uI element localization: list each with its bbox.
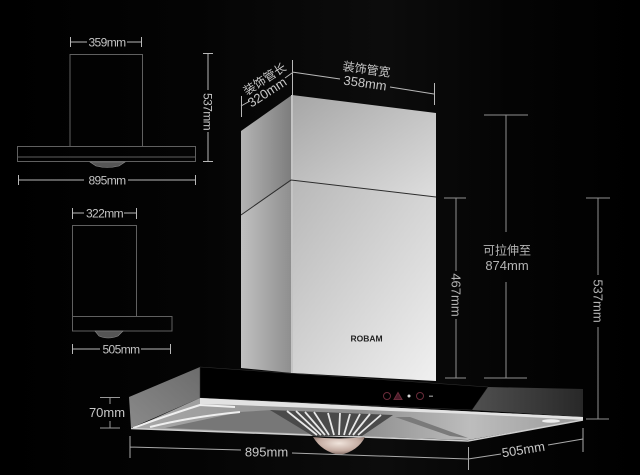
- dimension: 359mm: [70, 36, 142, 50]
- dimension: 359mm: 359mm: [88, 36, 126, 50]
- dimension: 874mm pull-out height: 可拉伸至: [483, 242, 531, 258]
- hood right side panel: [472, 387, 583, 417]
- dimension: 895mm front: [18, 174, 196, 188]
- fan slats: [270, 410, 393, 436]
- front hood outline: [17, 146, 196, 162]
- left white curved trim: [133, 405, 240, 428]
- chimney left face upper: [241, 95, 292, 215]
- brand logo: ROBAM: [350, 334, 383, 344]
- dimension: 467mm: [444, 198, 466, 378]
- dimension: 874mm pull-out height: 874mm: [485, 258, 529, 273]
- dimension: 874mm pull-out height: [483, 115, 531, 378]
- dimension: 895mm main: 895mm: [245, 444, 288, 460]
- dimension: 358mm chimney width: 装饰管宽: [342, 58, 391, 80]
- hood left side panel: [129, 367, 200, 428]
- hood bottom edge: [131, 420, 583, 441]
- dimension: 505mm side: [72, 342, 170, 356]
- dimension: 320mm chimney depth: 装饰管长: [240, 59, 289, 98]
- main product: range hood: [129, 95, 583, 455]
- dimension: 322mm: [72, 206, 136, 220]
- chimney left face lower: [241, 180, 292, 373]
- touch controls: [384, 392, 433, 400]
- front chimney outline: [70, 54, 142, 146]
- left underside shadow: [165, 410, 315, 434]
- dimension: 895mm main: [130, 436, 468, 470]
- dimension: 537mm front: [200, 54, 214, 162]
- dimension: 358mm chimney width: 358mm: [343, 73, 388, 93]
- side-view diagram: [72, 206, 172, 356]
- right underside shade: [395, 417, 468, 438]
- chimney corner highlight: [291, 95, 293, 373]
- side fan outline: [95, 331, 123, 338]
- dimension: 70mm: 70mm: [89, 405, 125, 420]
- crystal bowl: [313, 437, 365, 455]
- dimension: 320mm chimney depth: 320mm: [245, 74, 289, 110]
- chimney right face lower: [292, 180, 436, 381]
- dimension: 537mm right: 537mm: [590, 279, 606, 323]
- dimension: 505mm main: [468, 428, 583, 460]
- dimension: 322mm: 322mm: [86, 206, 124, 220]
- side chimney outline: [72, 226, 136, 316]
- top-view diagram: front elevation: [17, 36, 214, 188]
- dimension: 320mm chimney depth: [240, 59, 292, 117]
- front fan outline: [90, 162, 125, 168]
- dimension: 537mm right: [586, 198, 610, 419]
- black glass panel: [200, 367, 488, 410]
- hood front trim band: [200, 398, 583, 420]
- chimney right face upper: [292, 95, 436, 197]
- dimension: 537mm front: 537mm: [200, 93, 214, 131]
- dimension: 505mm side: 505mm: [102, 342, 140, 356]
- hood underside: [131, 398, 583, 440]
- right lamp: [542, 419, 560, 423]
- dimension: 505mm main: 505mm: [501, 439, 546, 460]
- side hood outline: [72, 316, 172, 331]
- dimension: 895mm front: 895mm: [88, 174, 126, 188]
- dimension: 358mm chimney width: [292, 58, 434, 105]
- dimension: 70mm: [89, 398, 125, 428]
- dimension: 467mm: 467mm: [448, 273, 464, 317]
- chimney seam: [241, 180, 436, 215]
